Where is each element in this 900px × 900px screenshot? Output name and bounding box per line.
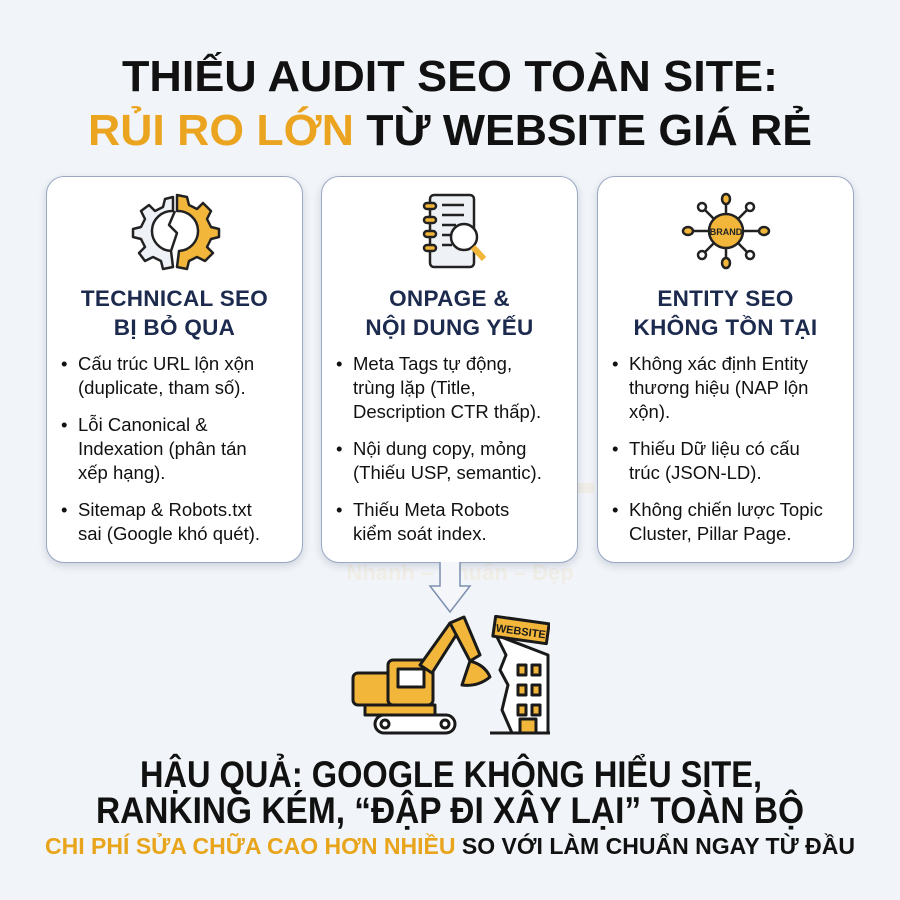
- bullet list: Nội dung copy, mỏng: [353, 438, 526, 459]
- heading: [634, 286, 817, 340]
- illustration: excavator demolishing website: [352, 615, 550, 734]
- icon: brand network: [682, 192, 770, 270]
- watermark: Nhanh – Chuẩn – Đẹp: [346, 560, 574, 585]
- illustration: excavator demolishing website: WEBSITE: [495, 623, 546, 641]
- heading: KHÔNG TỒN TẠI: [634, 315, 817, 340]
- title: THIẾU AUDIT SEO TOÀN SITE:: [122, 51, 778, 101]
- bullet list: [62, 353, 260, 544]
- bullet list: trùng lặp (Title,: [353, 377, 476, 398]
- title: [88, 51, 812, 155]
- bullet list: Cluster, Pillar Page.: [629, 523, 791, 544]
- bullet list: [336, 353, 542, 544]
- bullet list: Lỗi Canonical &: [78, 414, 208, 435]
- bullet list: Không chiến lược Topic: [629, 499, 823, 520]
- icon: brand network: BRAND: [710, 227, 743, 237]
- icon: broken gear: [132, 194, 220, 270]
- heading: [81, 286, 268, 340]
- heading: NỘI DUNG YẾU: [365, 315, 534, 340]
- bullet list: trúc (JSON-LD).: [629, 462, 762, 483]
- panel: technical seo: [46, 176, 303, 563]
- panel: entity seo: [597, 176, 854, 563]
- conclusion heading: HẬU QUẢ: GOOGLE KHÔNG HIỂU SITE,: [140, 753, 762, 795]
- heading: ONPAGE &: [389, 286, 510, 311]
- heading: TECHNICAL SEO: [81, 286, 268, 311]
- bullet list: thương hiệu (NAP lộn: [629, 377, 808, 398]
- bullet list: Không xác định Entity: [629, 353, 808, 374]
- conclusion heading: RANKING KÉM, “ĐẬP ĐI XÂY LẠI” TOÀN BỘ: [96, 789, 804, 831]
- heading: ENTITY SEO: [657, 286, 794, 311]
- bullet list: [612, 353, 823, 544]
- bullet list: kiểm soát index.: [353, 523, 487, 544]
- bullet list: xộn).: [629, 401, 670, 422]
- watermark: LIGHT: [325, 465, 595, 565]
- bullet list: xếp hạng).: [78, 462, 165, 483]
- heading: [365, 286, 534, 340]
- bullet list: Cấu trúc URL lộn xộn: [78, 353, 254, 374]
- bullet list: Thiếu Meta Robots: [353, 499, 509, 520]
- bullet list: Description CTR thấp).: [353, 401, 541, 422]
- bullet list: Meta Tags tự động,: [353, 353, 512, 374]
- heading: BỊ BỎ QUA: [114, 315, 235, 340]
- title: RỦI RO LỚN TỪ WEBSITE GIÁ RẺ: [88, 104, 812, 155]
- arrow: [428, 562, 472, 614]
- bullet list: (Thiếu USP, semantic).: [353, 462, 542, 483]
- conclusion heading: [45, 753, 855, 859]
- icon: notebook search: [422, 194, 486, 268]
- bullet list: Indexation (phân tán: [78, 438, 247, 459]
- bullet list: sai (Google khó quét).: [78, 523, 260, 544]
- conclusion heading: CHI PHÍ SỬA CHỮA CAO HƠN NHIỀU SO VỚI LÀM CHUẨN NGAY TỪ ĐẦU: [45, 831, 855, 859]
- bullet list: Thiếu Dữ liệu có cấu: [629, 438, 800, 459]
- bullet list: Sitemap & Robots.txt: [78, 499, 252, 520]
- panel: onpage: [321, 176, 578, 563]
- bullet list: (duplicate, tham số).: [78, 377, 246, 398]
